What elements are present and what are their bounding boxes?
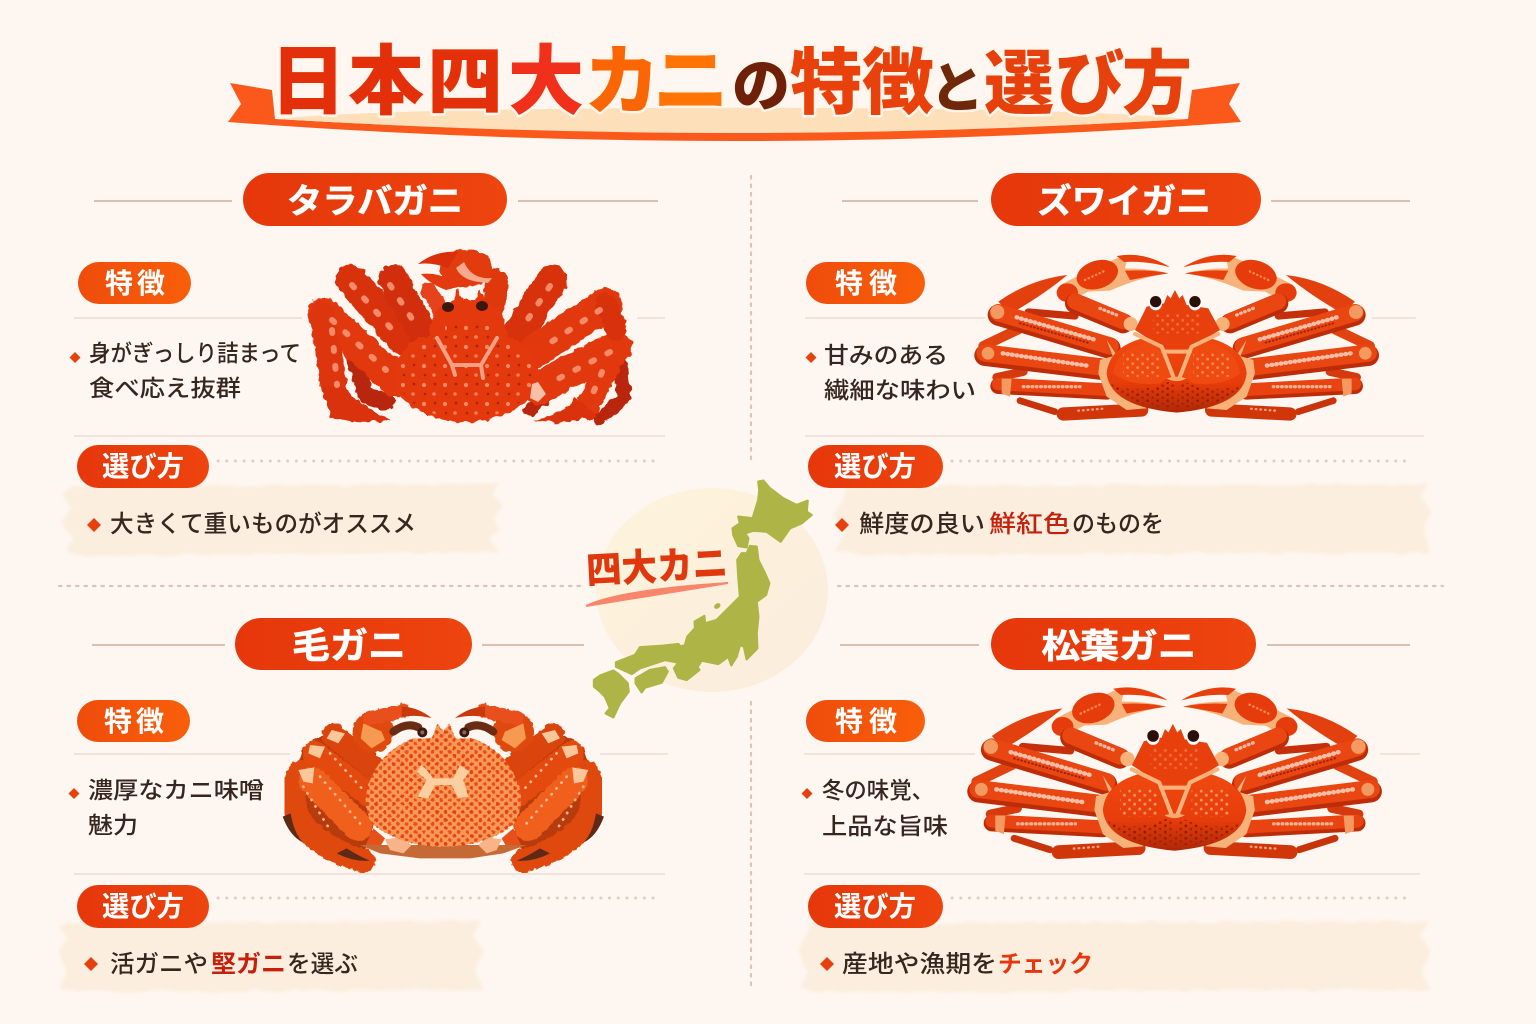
- label: 特徴: [78, 262, 191, 304]
- selection tip: チェック: [998, 951, 1093, 978]
- selection tip: [84, 951, 358, 978]
- title text: 本: [348, 40, 424, 125]
- features text: 濃厚なカニ味噌: [88, 777, 264, 803]
- label: 選び方: [808, 885, 943, 928]
- panel: 松葉ガニ: [798, 618, 1430, 992]
- title text: の: [732, 54, 790, 119]
- heading: 松葉ガニ: 松葉ガニ: [1042, 628, 1196, 666]
- features text: 魅力: [88, 812, 138, 838]
- features text: [802, 777, 948, 839]
- label: 特徴: [806, 262, 925, 304]
- label: 特徴: [77, 700, 190, 742]
- selection tip: [820, 951, 1093, 978]
- features text: 冬の味覚、: [822, 777, 934, 803]
- label: 選び方: 選び方: [102, 451, 184, 482]
- features text: 繊細な味わい: [824, 377, 976, 403]
- title text: 日: [270, 40, 346, 125]
- panel: タラバガニ: [62, 173, 665, 556]
- selection tip: 鮮紅色: [989, 511, 1070, 538]
- heading: 松葉ガニ: [840, 618, 1410, 670]
- banner ribbon: [228, 83, 1241, 141]
- title text: 選: [984, 45, 1054, 123]
- carapace: [366, 723, 521, 847]
- label: 特徴: 特徴: [104, 706, 164, 737]
- illustration: タラバガニ: [322, 249, 624, 422]
- features text: 甘みのある: [824, 342, 948, 368]
- features text: 食べ応え抜群: [89, 375, 241, 401]
- features text: [70, 340, 301, 401]
- title text: 徴: [862, 44, 934, 124]
- title text: 大: [508, 40, 584, 125]
- title text: 特: [790, 44, 862, 124]
- illustration: 松葉ガニ: [975, 687, 1374, 852]
- label: 選び方: 選び方: [102, 891, 184, 922]
- label: 特徴: 特徴: [835, 268, 897, 299]
- label: 選び方: [808, 445, 943, 488]
- selection tip background: [798, 921, 1430, 992]
- label: 特徴: [806, 700, 925, 742]
- heading: ズワイガニ: [842, 173, 1410, 226]
- heading: タラバガニ: タラバガニ: [287, 183, 463, 221]
- features text: 身がぎっしり詰まって: [89, 340, 301, 366]
- selection tip: 大きくて重いものがオススメ: [110, 511, 416, 538]
- panel: ズワイガニ: [805, 173, 1432, 555]
- heading: タラバガニ: [94, 173, 658, 226]
- title banner: [228, 40, 1241, 141]
- Japan silhouette: [594, 481, 812, 717]
- illustration: ズワイガニ: [982, 255, 1372, 414]
- selection tip: [835, 511, 1164, 538]
- selection tip background: [834, 484, 1432, 555]
- label: 特徴: 特徴: [835, 706, 897, 737]
- features text: 上品な旨味: [822, 813, 948, 839]
- label: 特徴: 特徴: [105, 268, 165, 299]
- selection tip background: [58, 921, 484, 992]
- heading: 毛ガニ: 毛ガニ: [292, 625, 406, 666]
- heading: 毛ガニ: [92, 618, 584, 670]
- selection tip: 活ガニや: [110, 951, 208, 978]
- label: 選び方: 選び方: [834, 891, 916, 922]
- selection tip: 堅ガニ: [211, 951, 286, 978]
- selection tip: 産地や漁期を: [842, 951, 997, 978]
- selection tip: 鮮度の良い: [859, 511, 985, 538]
- title text: ニ: [653, 40, 729, 125]
- heading: ズワイガニ: ズワイガニ: [1037, 182, 1211, 221]
- features text: [68, 777, 264, 838]
- selection tip: のものを: [1072, 511, 1164, 538]
- title text: び: [1055, 45, 1125, 123]
- label: 選び方: 選び方: [834, 451, 916, 482]
- illustration: 毛ガニ: [283, 707, 604, 861]
- panel: 毛ガニ: [58, 618, 668, 992]
- features text: [806, 342, 976, 403]
- selection tip: を選ぶ: [287, 951, 358, 978]
- label: 選び方: [77, 885, 209, 928]
- title text: [270, 40, 1192, 125]
- banner cream inner: [278, 108, 1185, 133]
- map label: 四大カニ: [585, 543, 729, 593]
- selection tip background: [62, 484, 503, 556]
- map disc: [596, 488, 828, 692]
- title text: 方: [1122, 45, 1192, 123]
- title text: カ: [584, 40, 660, 125]
- center map of Japan: [585, 481, 828, 717]
- label: 選び方: [77, 445, 209, 488]
- title text: と: [930, 59, 984, 119]
- title text: 四: [427, 40, 503, 125]
